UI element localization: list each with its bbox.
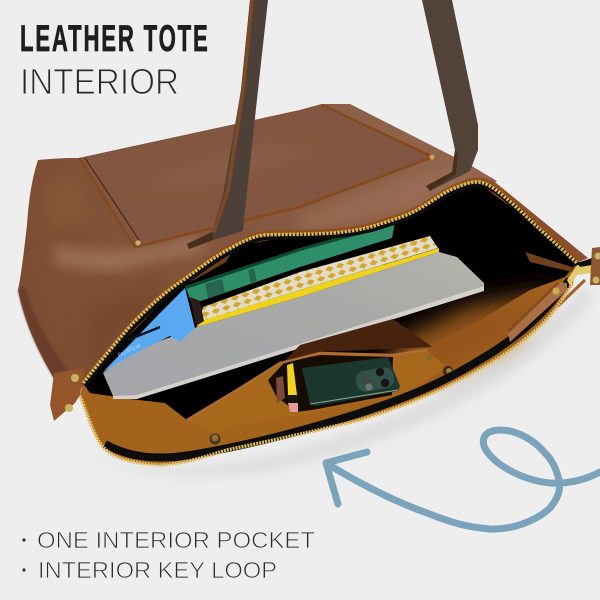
blue instant camera: FUJIFILM xyxy=(117,343,142,359)
dark upper interior xyxy=(83,182,577,420)
ground shadow xyxy=(60,285,592,477)
title: leather tote interior: INTERIOR xyxy=(20,61,179,102)
pocket leather lip xyxy=(187,350,427,420)
inner leather flap left xyxy=(186,250,233,284)
green book xyxy=(185,222,395,304)
left leather tab xyxy=(50,368,85,421)
bag interior suede xyxy=(80,182,577,465)
tote bag photo illustration xyxy=(18,0,600,477)
zipper pull xyxy=(567,265,592,286)
right leather tab xyxy=(577,247,600,285)
feature list xyxy=(22,527,315,583)
laptop xyxy=(103,252,484,399)
dark leather inner flap behind pocket xyxy=(285,319,432,360)
leather highlights xyxy=(55,235,210,272)
title: leather tote interior: LEATHER TOTE xyxy=(20,18,208,59)
interior pocket xyxy=(187,350,453,444)
interior key loop xyxy=(507,282,567,342)
title: leather tote interior xyxy=(20,18,208,102)
bullet: interior key loop: INTERIOR KEY LOOP xyxy=(38,557,277,583)
arrow pointing to interior xyxy=(326,430,600,529)
lower zipper xyxy=(80,280,585,465)
bag body leather xyxy=(18,104,497,390)
yellow pencil xyxy=(287,363,298,412)
pen xyxy=(276,376,285,403)
right strap xyxy=(422,0,478,191)
pocket opening shadow xyxy=(268,355,393,412)
blue instant camera xyxy=(103,288,204,372)
pocket rivets xyxy=(135,240,141,246)
smartphone in pocket xyxy=(302,357,400,406)
bullet: one interior pocket: ONE INTERIOR POCKET xyxy=(37,527,315,553)
yellow patterned notebook xyxy=(197,236,439,327)
leather side fold shading xyxy=(18,285,68,380)
back wall leather sliver xyxy=(525,252,575,272)
brown glow on rear interior wall xyxy=(380,292,552,378)
upper zipper xyxy=(83,178,588,386)
exterior pocket xyxy=(79,104,435,247)
left strap xyxy=(187,0,268,249)
pocket rivets xyxy=(427,354,433,360)
